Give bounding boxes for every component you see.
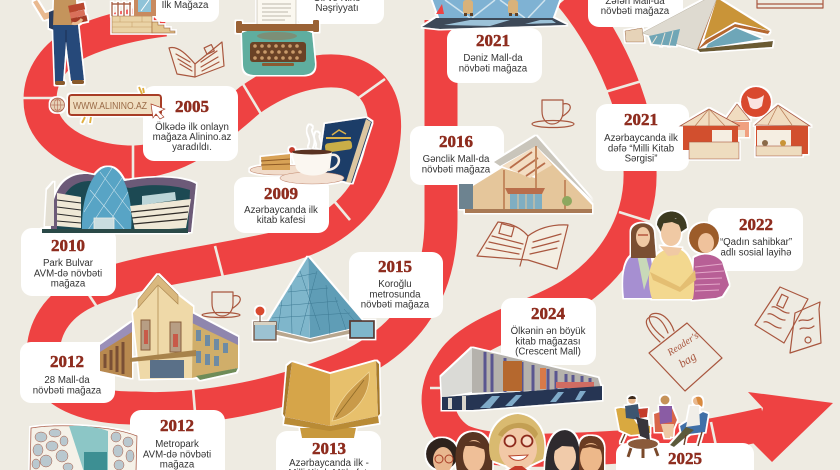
card: Zeni Mall xyxy=(588,0,683,27)
illustration: reading club xyxy=(616,396,708,458)
card: 2022 xyxy=(708,208,803,271)
description 2013: Azərbaycanda ilk - xyxy=(289,458,369,469)
illustration: typewriter xyxy=(236,0,319,75)
illustration: 28 Mall building xyxy=(100,275,238,380)
description 2015: Koroğlu xyxy=(378,279,412,290)
description 2016: Gənclik Mall-da xyxy=(423,154,489,165)
illustration: Metropark mall xyxy=(30,426,137,470)
description Deniz Mall: növbəti mağaza xyxy=(459,63,528,74)
arrow head xyxy=(748,392,833,462)
card: 2016 xyxy=(410,126,504,185)
description sergi: Sərgisi” xyxy=(625,154,657,165)
line art: teacup centre xyxy=(532,100,574,128)
illustration: coffee and book xyxy=(250,118,372,184)
year 2021: 2021 xyxy=(624,110,658,129)
description Metropark: AVM-də növbəti xyxy=(143,449,211,460)
illustration: woman with books xyxy=(33,0,88,85)
description 2024: Ölkənin ən böyük xyxy=(511,326,585,337)
description 2010: Park Bulvar xyxy=(43,258,93,269)
card: 2021 Deniz Mall xyxy=(447,28,542,83)
description 2024: kitab mağazası xyxy=(515,336,581,347)
description 28 Mall: növbəti mağaza xyxy=(33,385,102,396)
description 2010: mağaza xyxy=(51,279,86,290)
description 2022: “Qadın sahibkar” xyxy=(720,237,792,248)
card: 2013 xyxy=(276,431,381,470)
year 2010: 2010 xyxy=(51,236,85,255)
description sergi: Azərbaycanda ilk xyxy=(604,133,678,144)
card: ilk magaza xyxy=(153,0,219,22)
description 2022: adlı sosial layihə xyxy=(720,248,792,258)
year 2025: 2025 xyxy=(668,449,702,468)
illustration: golden book award xyxy=(283,361,380,438)
description 2005: Ölkədə ilk onlayn xyxy=(155,122,229,133)
description Deniz Mall: Dəniz Mall-da xyxy=(463,53,523,64)
illustration: Zefer Mall pyramid building xyxy=(625,0,773,52)
card: 2010 xyxy=(21,228,116,296)
illustration: website sign: WWW.ALININO.AZ xyxy=(73,100,147,112)
description 2010: AVM-də növbəti xyxy=(34,268,102,279)
illustration: book fair tents xyxy=(680,87,810,159)
year 2024: 2024 xyxy=(531,304,566,323)
year 2012: 2012 xyxy=(160,416,194,435)
description 2009: Azərbaycanda ilk xyxy=(244,205,318,216)
description 2005: mağaza Alinino.az xyxy=(153,132,231,143)
card: nesriyyati: Nəşriyyatı xyxy=(315,3,359,14)
illustration: three women xyxy=(623,212,729,300)
line art: letters xyxy=(755,287,821,353)
card: nesriyyati xyxy=(295,0,384,24)
description 28 Mall: 28 Mall-da xyxy=(44,375,90,386)
illustration: first store stairs xyxy=(112,0,175,33)
line art: reader's bag: Reader's xyxy=(665,330,701,359)
description 2005: yaradıldı. xyxy=(172,142,212,153)
card: 2005 xyxy=(143,86,238,161)
description Metropark: Metropark xyxy=(155,439,199,450)
year 2016: 2016 xyxy=(439,132,473,151)
card: 2015 xyxy=(349,252,443,318)
line art: reader's bag xyxy=(646,313,722,391)
year 2021: 2021 xyxy=(476,31,510,50)
line art: teacup lower left xyxy=(202,292,240,318)
description sergi: dəfə “Milli Kitab xyxy=(608,143,674,154)
card: Zeni Mall: növbəti mağaza xyxy=(601,6,670,17)
red timeline road: right part xyxy=(430,0,765,450)
description 2024: (Crescent Mall) xyxy=(515,347,581,358)
illustration: Deniz Mall xyxy=(422,0,567,29)
year 2012: 2012 xyxy=(50,352,84,371)
line art: top right book xyxy=(757,0,823,8)
description 2016: növbəti mağaza xyxy=(422,164,491,175)
illustration: Genclik Mall xyxy=(459,136,592,213)
description 2015: növbəti mağaza xyxy=(361,300,430,311)
illustration: Park Bulvar mall xyxy=(42,167,196,233)
illustration: website sign xyxy=(50,87,165,123)
description 2009: kitab kafesi xyxy=(257,215,305,226)
year 2013: 2013 xyxy=(312,439,346,458)
card: 2025 xyxy=(616,443,754,470)
card: ilk magaza: İlk Mağaza xyxy=(162,0,209,11)
illustration: team portraits xyxy=(426,414,604,470)
card: 2021 Milli Kitab Sergisi xyxy=(596,104,689,171)
line art: reader's bag: bag xyxy=(676,349,699,371)
description 2015: metrosunda xyxy=(369,289,421,300)
card: 2024 xyxy=(501,298,596,365)
card: 2012 Metropark xyxy=(130,410,225,470)
red timeline road: left part xyxy=(20,20,441,412)
line art: open book small xyxy=(169,42,224,77)
illustration: Koroglu pyramid xyxy=(254,257,374,342)
year 2015: 2015 xyxy=(378,257,412,276)
year 2022: 2022 xyxy=(739,215,773,234)
card: 2009 xyxy=(234,177,329,233)
line art: large open book xyxy=(477,222,568,269)
illustration: Crescent Mall xyxy=(441,348,602,410)
year 2009: 2009 xyxy=(264,184,298,203)
year 2005: 2005 xyxy=(175,97,209,116)
card: 2012 28 Mall xyxy=(20,342,115,403)
